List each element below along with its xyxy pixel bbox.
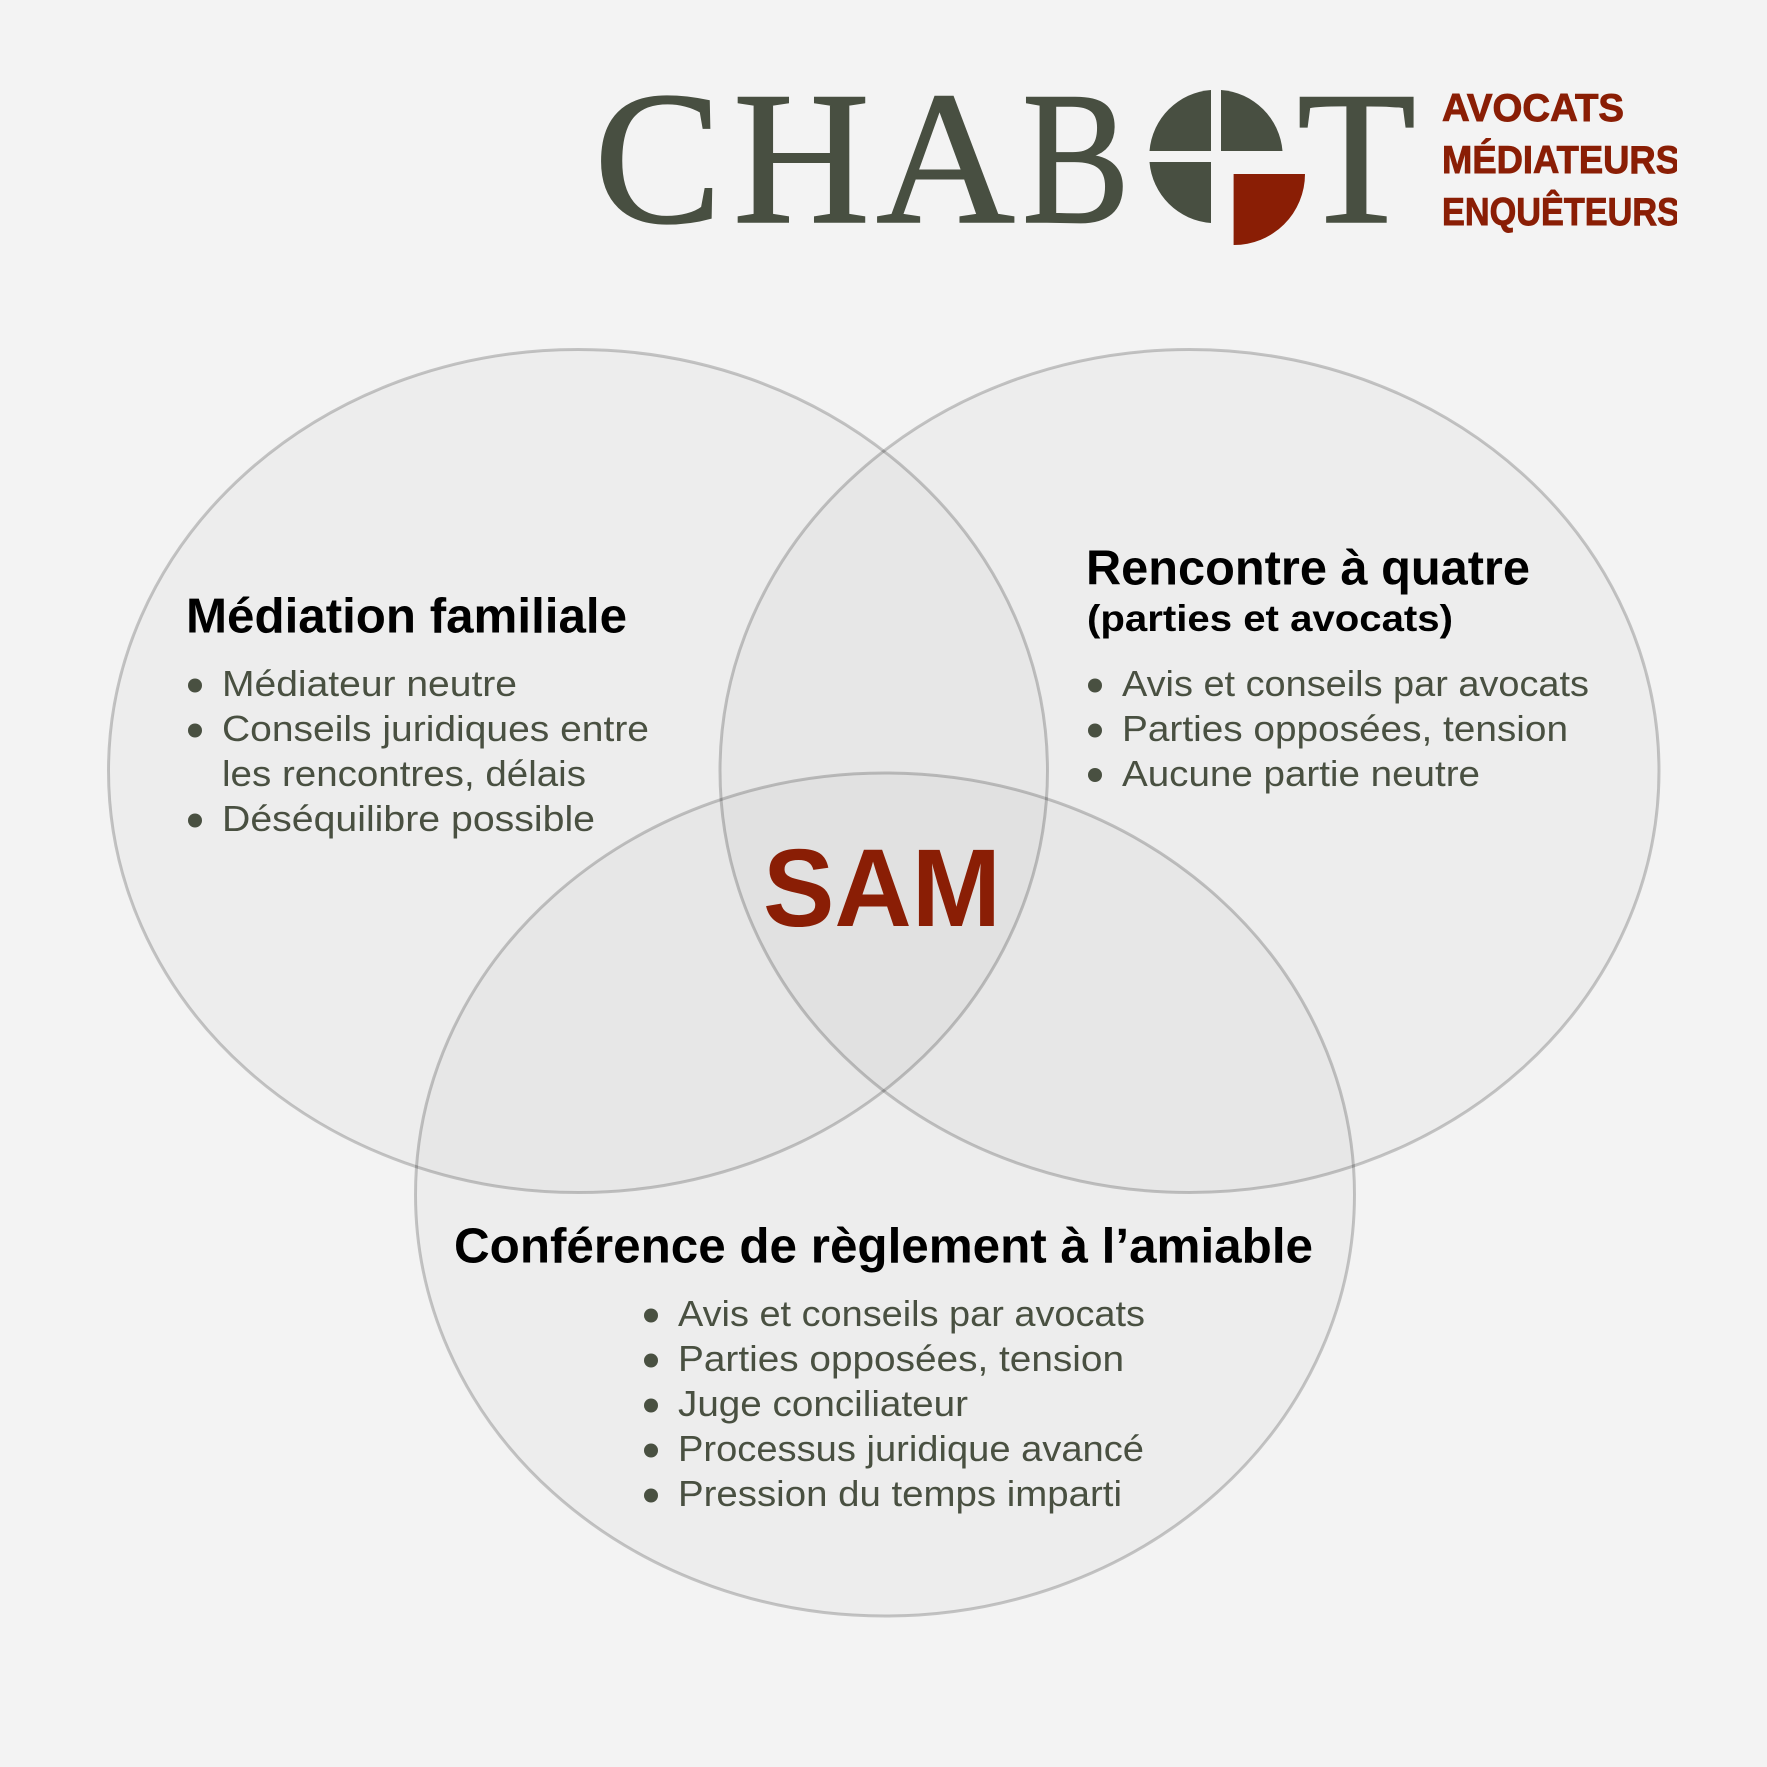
logo tagline: ENQUÊTEURS — [1442, 190, 1680, 234]
list: Médiation familiale points: Déséquilibre possible — [222, 798, 595, 839]
logo symbol: quartered circle — [1150, 90, 1305, 245]
list: Rencontre à quatre points: Avis et conseils par avocats — [1122, 663, 1589, 704]
panel: Médiation familiale — [186, 590, 649, 839]
subheading: parties et avocats: (parties et avocats) — [1087, 598, 1453, 639]
list: Médiation familiale points: les rencontres, délais — [222, 753, 586, 794]
panel: Conférence de règlement à l'amiable — [454, 1220, 1313, 1514]
logo wordmark letters — [601, 95, 1414, 225]
list: Rencontre à quatre points: Aucune partie neutre — [1122, 753, 1480, 794]
list: Conférence points: Avis et conseils par avocats — [678, 1293, 1145, 1334]
venn diagram circles — [108, 350, 1659, 1616]
center label: SAM: SAM — [763, 827, 1001, 950]
logo tagline — [1442, 87, 1680, 234]
list: Conférence points: Pression du temps imparti — [678, 1473, 1122, 1514]
list: Conférence points: Juge conciliateur — [678, 1383, 968, 1424]
list: Rencontre à quatre points: Parties opposées, tension — [1122, 708, 1568, 749]
logo wordmark letters: A — [876, 54, 1015, 264]
list: Médiation familiale points: Médiateur neutre — [222, 663, 517, 704]
logo tagline: MÉDIATEURS — [1442, 138, 1680, 182]
heading: Conférence de règlement à l'amiable: Conférence de règlement à l’amiable — [454, 1220, 1313, 1274]
list: Médiation familiale points — [188, 663, 649, 839]
list: Rencontre à quatre points — [1088, 663, 1589, 794]
heading: Médiation familiale: Médiation familiale — [186, 590, 627, 644]
list: Conférence points: Parties opposées, tension — [678, 1338, 1124, 1379]
list: Médiation familiale points: Conseils juridiques entre — [222, 708, 649, 749]
logo wordmark letters: C — [594, 54, 722, 264]
logo wordmark letters: B — [1022, 54, 1130, 264]
heading: Rencontre à quatre: Rencontre à quatre — [1086, 542, 1530, 596]
logo wordmark letters: T — [1297, 54, 1416, 264]
logo: Chabot — [601, 90, 1677, 245]
logo wordmark letters: H — [733, 54, 870, 264]
panel: Rencontre à quatre — [1086, 542, 1589, 794]
logo tagline: AVOCATS — [1442, 87, 1624, 130]
list: Conférence points — [644, 1293, 1145, 1514]
list: Conférence points: Processus juridique avancé — [678, 1428, 1144, 1469]
